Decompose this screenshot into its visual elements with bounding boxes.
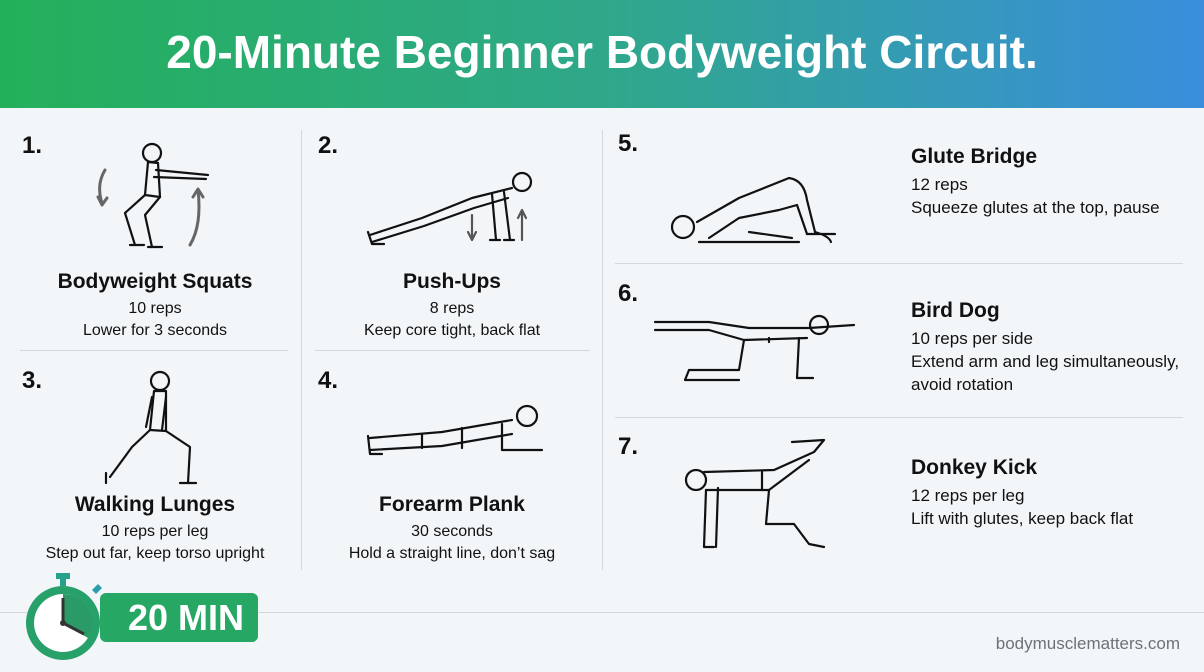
number 2: 2. xyxy=(318,132,338,159)
title: 20-Minute Beginner Bodyweight Circuit. xyxy=(166,26,1038,78)
text: plank: 30 seconds xyxy=(411,523,493,540)
text: glute bridge: Glute Bridge xyxy=(911,145,1037,168)
text: glute bridge xyxy=(911,145,1160,217)
text: bird dog: Bird Dog xyxy=(911,299,1000,322)
panel: lunges xyxy=(22,367,264,562)
icon: stopwatch xyxy=(26,573,102,660)
text: lunges: 10 reps per leg xyxy=(102,523,208,540)
icon: lunge figure xyxy=(104,370,198,484)
text: push-ups: 8 reps xyxy=(430,300,474,317)
badge pill: 20 MIN xyxy=(128,597,244,638)
number 3: 3. xyxy=(22,367,42,394)
text: push-ups: Push-Ups xyxy=(403,270,501,293)
text: bird dog: Extend arm and leg simultaneously, xyxy=(911,352,1179,371)
panel: plank xyxy=(318,367,555,562)
number 6: 6. xyxy=(618,280,638,307)
text: donkey kick: 12 reps per leg xyxy=(911,486,1024,505)
text: lunges xyxy=(46,493,264,562)
panel: squats xyxy=(22,132,252,339)
icon: donkey kick figure xyxy=(684,438,826,548)
text: glute bridge: 12 reps xyxy=(911,175,968,194)
badge: 20 min timer xyxy=(26,573,258,660)
number 5: 5. xyxy=(618,130,638,157)
text: donkey kick: Donkey Kick xyxy=(911,456,1037,479)
icon: bird dog figure xyxy=(654,314,856,382)
panel: donkey kick xyxy=(618,433,1133,548)
text: squats: Lower for 3 seconds xyxy=(83,322,227,339)
text: donkey kick xyxy=(911,456,1133,528)
text: plank xyxy=(349,493,555,562)
text: glute bridge: Squeeze glutes at the top, pause xyxy=(911,198,1160,217)
icon: plank figure xyxy=(366,404,544,456)
icon: squat figure xyxy=(96,142,210,248)
number 4: 4. xyxy=(318,367,338,394)
text: push-ups xyxy=(364,270,540,339)
panel: glute bridge xyxy=(618,130,1160,244)
badge pill xyxy=(100,593,258,642)
text: squats: 10 reps xyxy=(128,300,182,317)
header banner xyxy=(0,0,1204,108)
text: plank: Hold a straight line, don’t sag xyxy=(349,545,555,562)
panel: bird dog xyxy=(618,280,1179,394)
icon: push-up figure xyxy=(366,172,532,246)
text: lunges: Walking Lunges xyxy=(75,493,235,516)
footer: website: bodymusclematters.com xyxy=(996,634,1180,653)
text: bird dog: avoid rotation xyxy=(911,375,1013,394)
text: bird dog xyxy=(911,299,1179,394)
number 7: 7. xyxy=(618,433,638,460)
text: bird dog: 10 reps per side xyxy=(911,329,1033,348)
number 1: 1. xyxy=(22,132,42,159)
panel: push-ups xyxy=(318,132,540,339)
text: plank: Forearm Plank xyxy=(379,493,525,516)
icon: glute bridge figure xyxy=(670,176,836,244)
text: squats: Bodyweight Squats xyxy=(58,270,252,293)
text: donkey kick: Lift with glutes, keep back flat xyxy=(911,509,1133,528)
text: squats xyxy=(58,270,252,339)
text: lunges: Step out far, keep torso upright xyxy=(46,545,264,562)
text: push-ups: Keep core tight, back flat xyxy=(364,322,540,339)
dividers xyxy=(301,130,302,570)
